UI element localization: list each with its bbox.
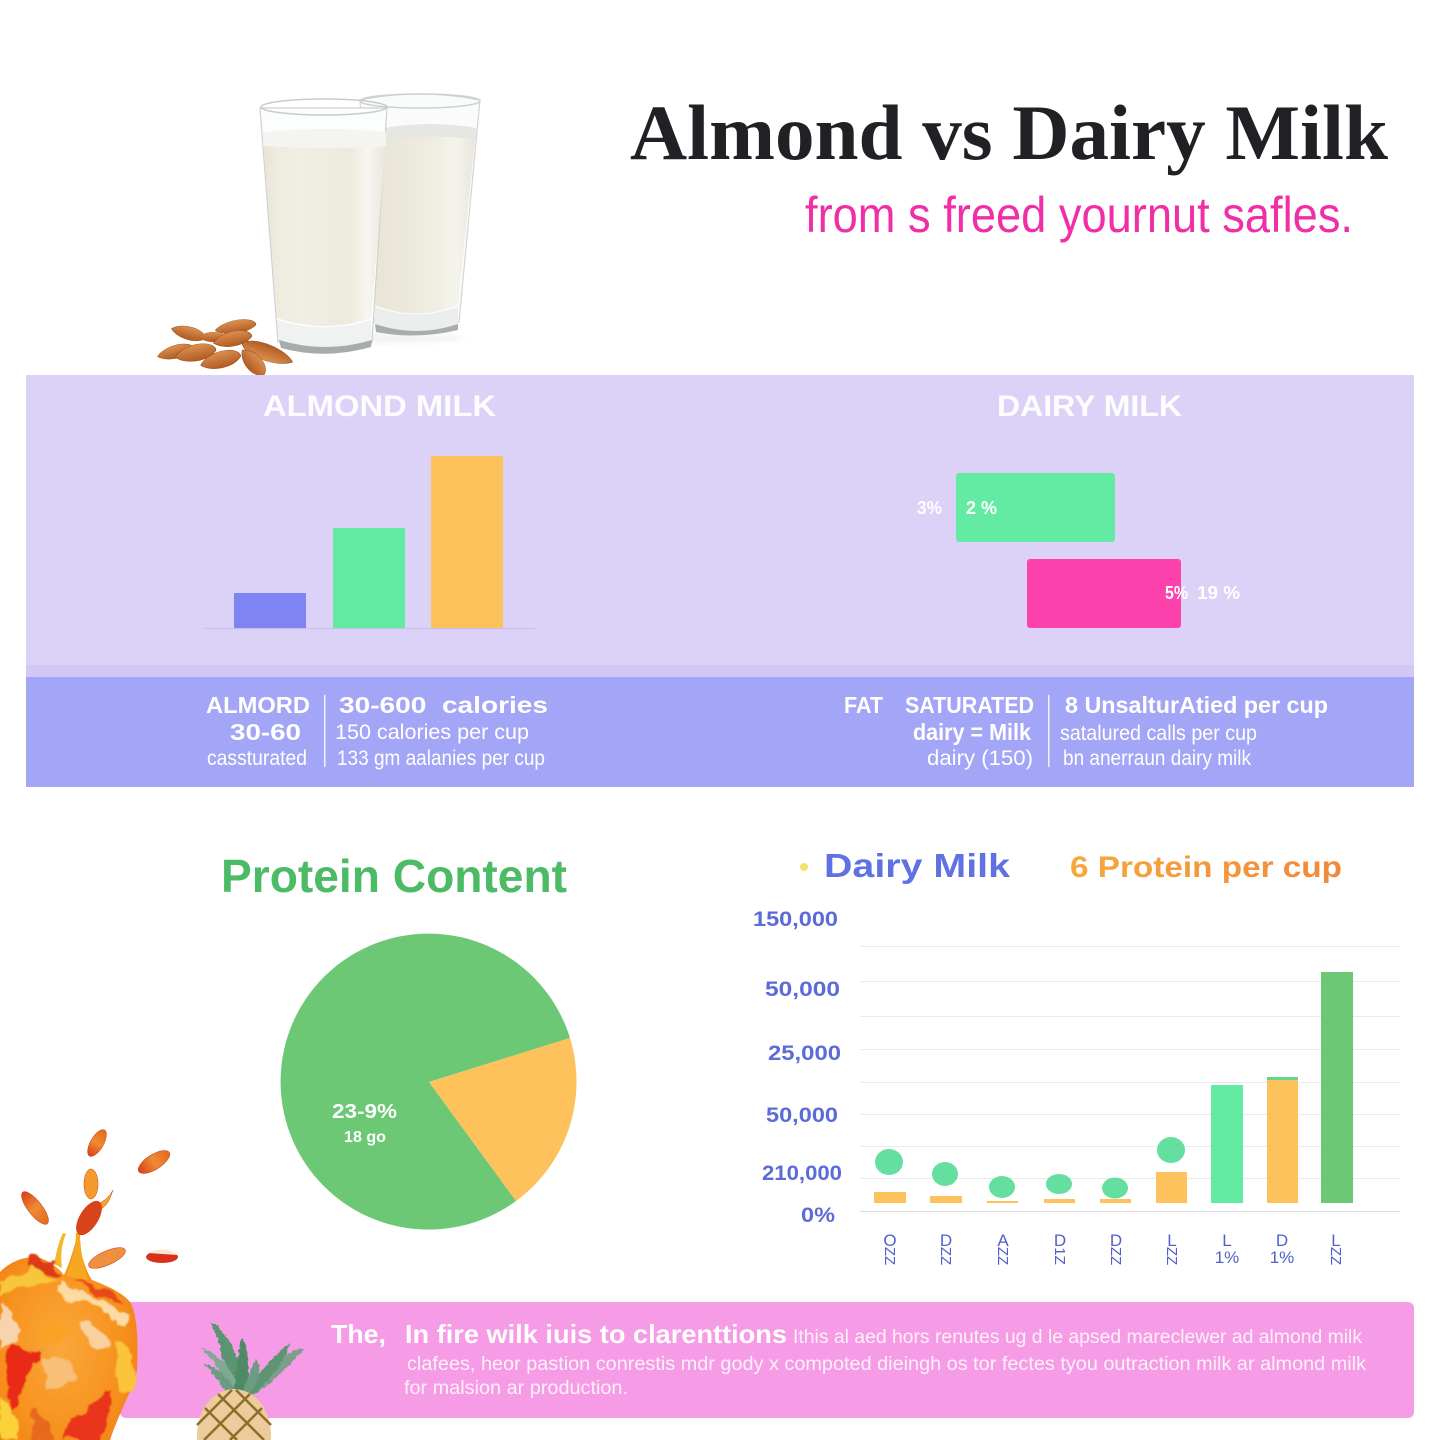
- x axis labels: L: [1167, 1231, 1177, 1250]
- panel: conclusion: for malsion ar production.: [404, 1378, 628, 1399]
- y axis labels: 25,000: [768, 1042, 841, 1065]
- bar chart: protein per cup: [753, 908, 1400, 1267]
- x axis labels: A: [997, 1231, 1009, 1250]
- pie chart: [281, 934, 577, 1230]
- panel background: stats strip: [26, 677, 1414, 787]
- panel background: lavender: [26, 375, 1414, 666]
- bars and dots: [874, 972, 1353, 1203]
- legend: dairy milk: Dairy Milk: [824, 847, 1011, 884]
- x axis labels: ZZ: [1327, 1247, 1344, 1265]
- x axis labels: 1Z: [1051, 1247, 1068, 1265]
- left glass: [260, 99, 387, 354]
- bar chart: dairy milk: 3%: [917, 498, 942, 518]
- stats: dairy: 8 UnsalturAtied per cup: [1065, 692, 1328, 718]
- stats: almond: 30-60: [230, 719, 301, 745]
- stats: almond: [206, 692, 548, 770]
- splash body: [0, 1233, 137, 1440]
- seeds: [17, 1127, 178, 1273]
- heading: dairy milk: DAIRY MILK: [997, 390, 1182, 423]
- panel: comparison: [26, 375, 1414, 787]
- right glass: [360, 94, 480, 336]
- stats: almond: cassturated: [207, 747, 307, 770]
- x axis labels: 1%: [1270, 1248, 1294, 1267]
- y axis labels: 50,000: [765, 978, 840, 1001]
- subtitle: from s freed yournut safles.: [805, 187, 1353, 243]
- x axis labels: O: [883, 1231, 897, 1250]
- x axis labels: ZZ: [994, 1247, 1011, 1265]
- illustration: pineapple: [197, 1322, 304, 1440]
- illustration: glasses of milk: [260, 94, 480, 354]
- x axis labels: ZZ: [937, 1247, 954, 1265]
- panel: conclusion: In fire wilk iuis to clarenttions: [405, 1319, 787, 1349]
- x axis labels: D: [1276, 1231, 1288, 1250]
- stats: almond: ALMORD: [206, 692, 310, 718]
- bar chart: dairy milk: 5%: [1165, 583, 1188, 603]
- bar chart: dairy milk: 19 %: [1197, 583, 1240, 603]
- title: Almond vs Dairy Milk: [630, 89, 1389, 176]
- bar chart: almond milk: [205, 456, 535, 629]
- y axis labels: 150,000: [753, 908, 838, 931]
- stats: dairy: FAT: [844, 692, 883, 718]
- x axis labels: D: [940, 1231, 952, 1250]
- x axis labels: ZZ: [1163, 1247, 1180, 1265]
- bar chart: dairy milk: [917, 473, 1240, 628]
- bar chart: dairy milk: 2 %: [966, 498, 997, 518]
- stats: almond: 133 gm aalanies per cup: [337, 747, 545, 770]
- heading: almond milk: ALMOND MILK: [263, 390, 496, 423]
- panel divider strip: [26, 665, 1414, 677]
- panel: conclusion: [120, 1302, 1414, 1418]
- stats: almond: 150 calories per cup: [335, 721, 529, 744]
- y axis labels: [753, 908, 842, 1227]
- stats: dairy: dairy = Milk: [913, 719, 1031, 745]
- x axis labels: L: [1222, 1231, 1232, 1250]
- panel: conclusion: Ithis al aed hors renutes ug d le apsed mareclewer ad almond milk: [793, 1327, 1363, 1348]
- stats: dairy: SATURATED: [905, 692, 1034, 718]
- x axis labels: 1%: [1215, 1248, 1239, 1267]
- panel: conclusion: clafees, heor pastion conrestis mdr gody x compoted dieingh os tor fectes tyou outraction milk ar almond milk: [407, 1354, 1367, 1375]
- heading: protein content: Protein Content: [221, 850, 567, 902]
- stats: dairy: [844, 692, 1328, 770]
- stats: dairy: dairy (150): [927, 747, 1033, 770]
- pie chart: 23-9%: [332, 1101, 397, 1123]
- stats: dairy: bn anerraun dairy milk: [1063, 747, 1251, 770]
- x axis labels: L: [1331, 1231, 1341, 1250]
- illustration: almonds: [156, 317, 295, 380]
- x axis labels: D: [1110, 1231, 1122, 1250]
- panel: conclusion: The,: [331, 1319, 386, 1349]
- y axis labels: 210,000: [762, 1162, 842, 1185]
- y axis labels: 0%: [801, 1204, 835, 1227]
- pie chart: 18 go: [344, 1129, 386, 1146]
- x axis labels: D: [1054, 1231, 1066, 1250]
- stats: dairy: satalured calls per cup: [1060, 722, 1257, 745]
- x axis labels: ZZ: [881, 1247, 898, 1265]
- y axis labels: 50,000: [766, 1104, 838, 1127]
- illustration: orange juice splash: [0, 1127, 178, 1440]
- x axis labels: ZZ: [1107, 1247, 1124, 1265]
- x axis labels: [881, 1231, 1344, 1267]
- legend: protein per cup: 6 Protein per cup: [1070, 851, 1342, 884]
- stats: almond: 30-600 calories: [339, 692, 548, 718]
